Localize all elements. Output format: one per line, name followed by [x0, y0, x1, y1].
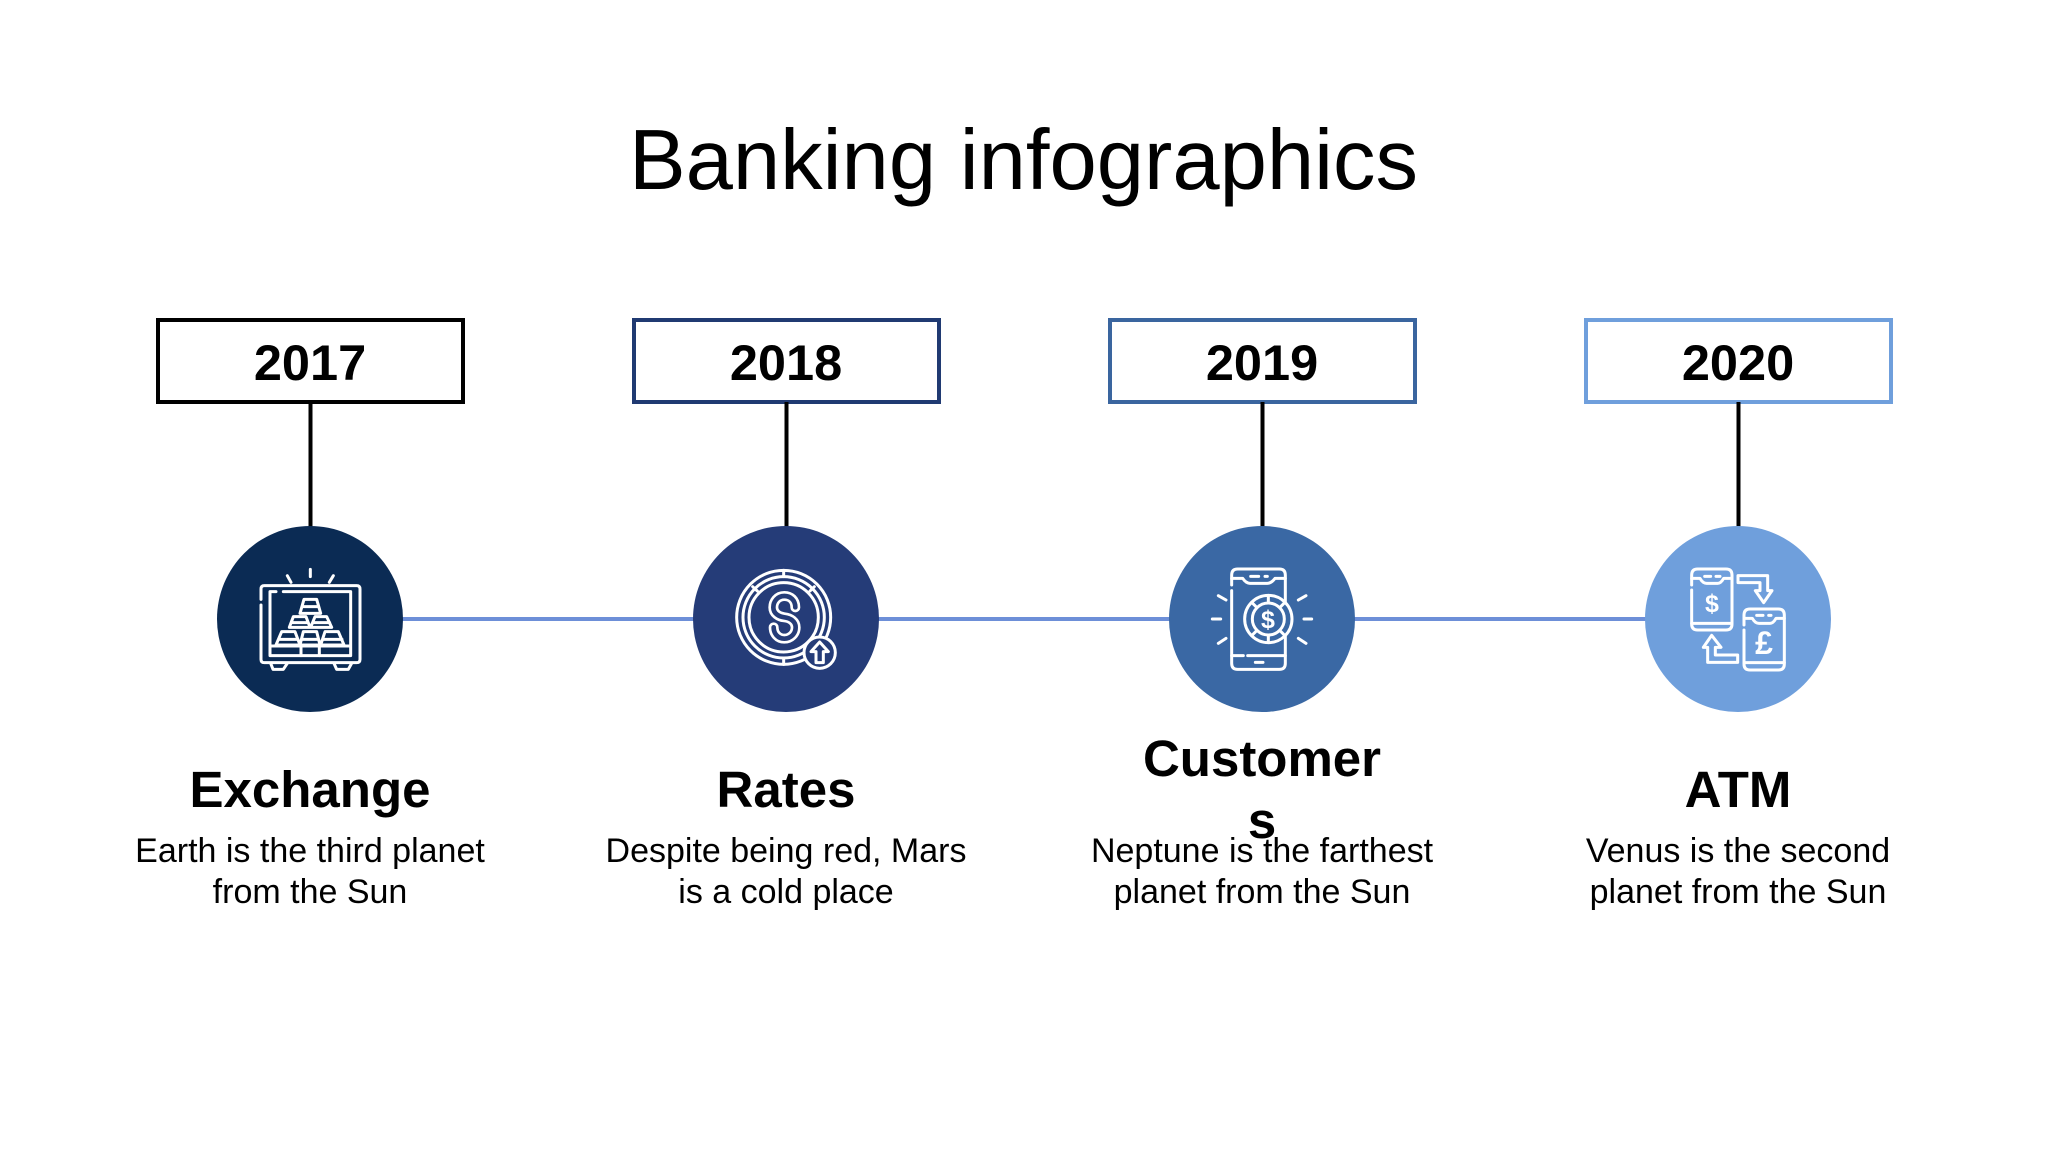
description: Mars: Despite being red, Mars — [606, 832, 966, 870]
stem — [308, 402, 312, 528]
year box: 2020 — [1586, 320, 1891, 402]
icon: two phones exchanging currency — [1645, 526, 1831, 712]
icon: dollar coin with up arrow — [693, 526, 879, 712]
panel: 2020 ATM — [1586, 320, 1891, 911]
stem — [1260, 402, 1264, 528]
pound glyph: £ — [1755, 625, 1773, 661]
panel: 2019 Customers — [1091, 320, 1434, 911]
dollar glyph: $ — [1705, 590, 1719, 618]
heading: Customers, wrapped: Customer — [1143, 730, 1381, 787]
dollar glyph: $ — [1261, 606, 1275, 634]
heading: Exchange: Exchange — [190, 761, 430, 818]
year box: 2017: 2017 — [254, 334, 366, 391]
stem — [784, 402, 788, 528]
heading: ATM: ATM — [1685, 761, 1791, 818]
icon: phone with coin — [1169, 526, 1355, 712]
year box: 2018 — [634, 320, 939, 402]
description: Neptune: planet from the Sun — [1114, 873, 1410, 911]
year box: 2019 — [1110, 320, 1415, 402]
description: Earth: Earth is the third planet — [135, 832, 485, 870]
icon: gold bars in safe — [217, 526, 403, 712]
description: Venus: Venus is the second — [1586, 832, 1890, 870]
year box: 2019: 2019 — [1206, 334, 1318, 391]
stem — [1736, 402, 1740, 528]
year box: 2020: 2020 — [1682, 334, 1794, 391]
description: Earth: from the Sun — [213, 873, 407, 911]
description: Mars: is a cold place — [678, 873, 894, 911]
year box: 2017 — [158, 320, 463, 402]
panel: 2018 Rates — [606, 320, 966, 911]
panel: 2017 Exchange — [135, 320, 485, 911]
timeline connector — [400, 617, 1648, 621]
year box: 2018: 2018 — [730, 334, 842, 391]
description: Neptune: Neptune is the farthest — [1091, 832, 1433, 870]
heading: Customers, wrapped: s — [1248, 792, 1276, 849]
title: Banking infographics — [629, 113, 1418, 208]
heading: Rates: Rates — [717, 761, 855, 818]
description: Venus: planet from the Sun — [1590, 873, 1886, 911]
